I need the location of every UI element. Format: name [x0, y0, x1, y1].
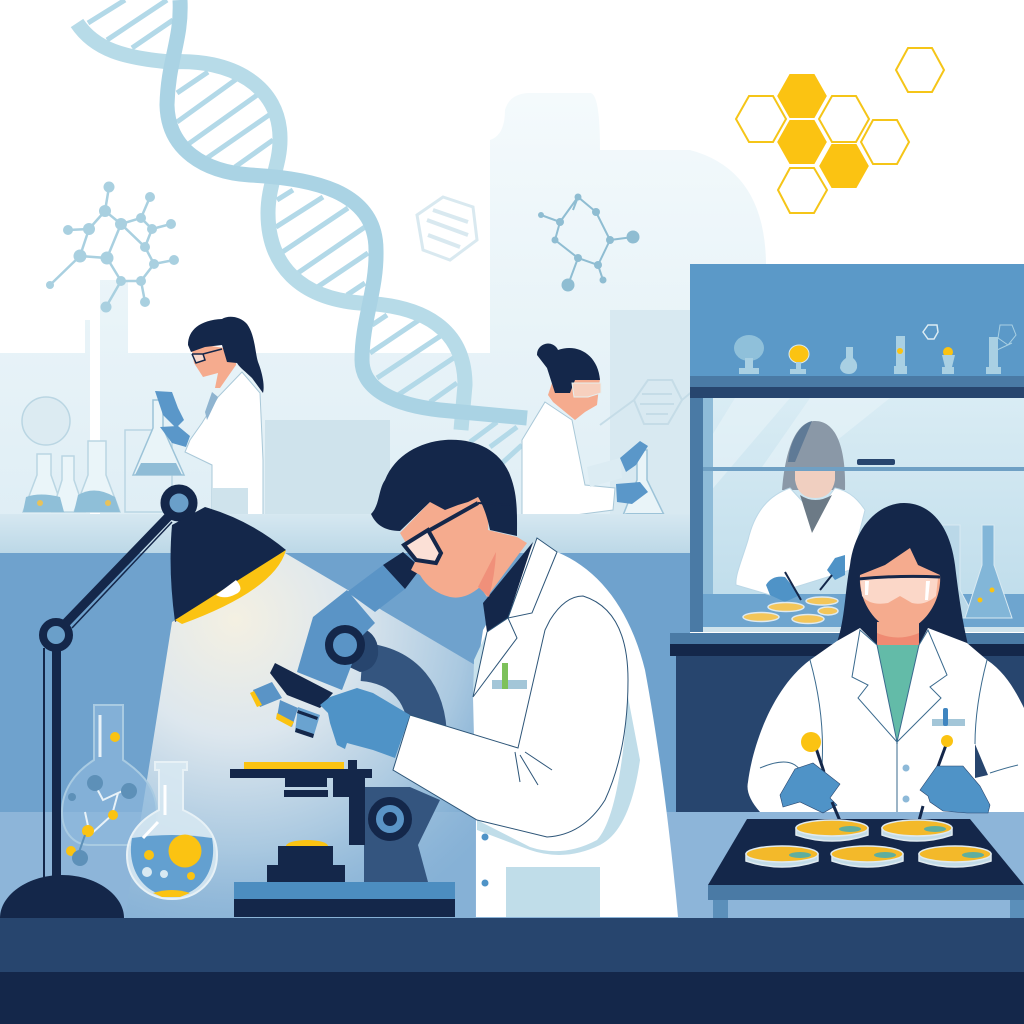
left glove	[780, 763, 840, 813]
objective lens one	[253, 682, 282, 707]
sleeve folds	[515, 752, 552, 785]
hood work surface	[703, 594, 1024, 632]
scientist: foreground right	[748, 503, 1024, 828]
coat buttons	[482, 834, 488, 840]
left tool lower	[832, 802, 843, 828]
lamp elbow joint	[43, 622, 69, 648]
left lapel	[852, 630, 897, 742]
sediment	[153, 890, 190, 897]
neck	[877, 622, 919, 645]
glass flask: front with yellow liquid	[127, 762, 217, 899]
glass reflections	[703, 398, 890, 500]
small hexagon icon	[923, 325, 938, 339]
coat	[185, 372, 263, 515]
DNA rungs	[88, 0, 522, 465]
pale patch	[542, 528, 578, 553]
cone of lamp light	[125, 553, 475, 918]
coat pocket	[506, 867, 600, 917]
glove	[320, 688, 410, 758]
shelf	[690, 376, 1024, 387]
slide on stage	[244, 762, 344, 769]
lamp base	[0, 875, 124, 918]
glass flask: rear	[62, 705, 157, 866]
dark shirt	[483, 542, 533, 632]
illuminator	[286, 840, 328, 852]
scientist: foreground at microscope	[320, 440, 678, 917]
gloves	[616, 441, 648, 504]
pocket pens	[932, 719, 965, 726]
DNA strand two	[167, 0, 527, 418]
arm gap	[975, 744, 988, 778]
gloves	[155, 391, 190, 447]
back scientist	[736, 421, 865, 624]
scientist: back centre with bun	[522, 344, 668, 553]
right glove	[920, 766, 990, 813]
cabinet below hood	[670, 633, 1024, 812]
culture spots	[789, 826, 984, 858]
right tool upper	[936, 745, 946, 772]
goggle highlights	[865, 581, 930, 600]
front table surface	[0, 812, 1024, 918]
hair and ponytail	[188, 317, 264, 393]
face	[400, 497, 527, 598]
left tool upper	[815, 745, 824, 772]
coat and arm	[522, 402, 615, 553]
lamp shade	[171, 507, 286, 622]
shirt	[800, 495, 832, 533]
background: city silhouette	[0, 93, 766, 520]
desk lamp	[0, 489, 286, 918]
stage	[230, 760, 372, 845]
glass pane	[703, 398, 1024, 632]
sleeve	[587, 458, 622, 487]
background flasks on counter	[22, 397, 172, 512]
tray edge	[708, 885, 1024, 900]
coat inner shade	[473, 632, 487, 697]
lapel	[473, 618, 517, 697]
goggles	[860, 578, 938, 604]
sash bar	[703, 467, 1024, 471]
collar	[508, 538, 557, 618]
coat	[736, 488, 865, 595]
inner shirt	[205, 392, 218, 420]
foreground bench	[0, 918, 1024, 1024]
glasses	[192, 349, 222, 363]
tray legs	[713, 900, 728, 918]
eyepiece	[383, 552, 421, 589]
right lapel	[897, 630, 947, 742]
molecule: left network	[46, 182, 179, 312]
flask	[133, 400, 184, 475]
bulb	[216, 580, 240, 597]
flask highlight	[98, 715, 102, 757]
hair	[371, 440, 517, 536]
flask liquid	[131, 835, 213, 896]
neck shadow	[478, 552, 496, 597]
left frame	[690, 398, 703, 632]
atoms	[110, 732, 120, 742]
focus knob	[329, 629, 361, 661]
face	[548, 378, 600, 420]
objective lens two	[277, 700, 298, 727]
coat	[473, 538, 678, 917]
microscope	[230, 552, 455, 917]
neck shadow	[877, 633, 919, 646]
icon: pale hexagon behind scientist	[600, 380, 700, 425]
fume hood	[690, 264, 1024, 632]
gloves	[766, 555, 845, 602]
right tool lower	[917, 806, 923, 828]
face	[860, 548, 940, 632]
arm connector	[345, 625, 378, 672]
tray top	[708, 819, 1024, 885]
DNA strand one	[77, 23, 465, 430]
goggles	[572, 383, 601, 397]
hood top panel	[690, 264, 1024, 376]
goggle strap	[858, 576, 940, 579]
sash handle	[857, 459, 895, 465]
flask liquid	[135, 463, 182, 475]
hair and bun	[537, 344, 600, 393]
glasses	[404, 503, 510, 563]
coat pale patch	[212, 488, 248, 515]
tray with petri dishes	[708, 819, 1024, 918]
coat buttons	[902, 764, 910, 772]
arm	[362, 662, 428, 740]
sleeve	[393, 596, 628, 837]
face	[795, 468, 835, 498]
lower body	[364, 787, 440, 882]
back wall	[0, 553, 690, 812]
neck and face	[192, 345, 237, 388]
lamp pole	[43, 640, 61, 880]
honeycomb hexagons	[736, 48, 944, 213]
lamp rim	[175, 550, 286, 624]
lamp arm	[62, 515, 170, 627]
coat seams	[760, 660, 1018, 812]
hair	[837, 503, 968, 660]
dishes	[746, 820, 991, 867]
flask liquid	[623, 513, 666, 522]
glassware on shelf	[734, 325, 1016, 374]
scientist: back left with ponytail	[133, 317, 264, 515]
dishes	[743, 597, 838, 624]
turret	[270, 663, 333, 708]
coat	[748, 628, 1024, 812]
icon: pale striped hexagon	[417, 197, 477, 260]
eyepiece tube	[347, 565, 405, 612]
coat shadow	[477, 697, 640, 855]
bubbles	[168, 834, 202, 868]
head body	[297, 590, 375, 690]
hair shadow	[788, 421, 812, 462]
objective lens three	[295, 707, 320, 738]
base	[234, 882, 455, 899]
flask	[620, 450, 668, 523]
tools	[785, 572, 832, 600]
hair	[782, 421, 845, 490]
DNA double helix	[77, 0, 527, 465]
lamp top joint	[165, 489, 193, 517]
molecule: right network	[538, 194, 640, 292]
shirt	[877, 645, 919, 742]
coarse knob	[372, 801, 408, 837]
pocket pens	[492, 680, 527, 689]
counter band	[0, 514, 690, 553]
back flasks	[942, 525, 1012, 618]
